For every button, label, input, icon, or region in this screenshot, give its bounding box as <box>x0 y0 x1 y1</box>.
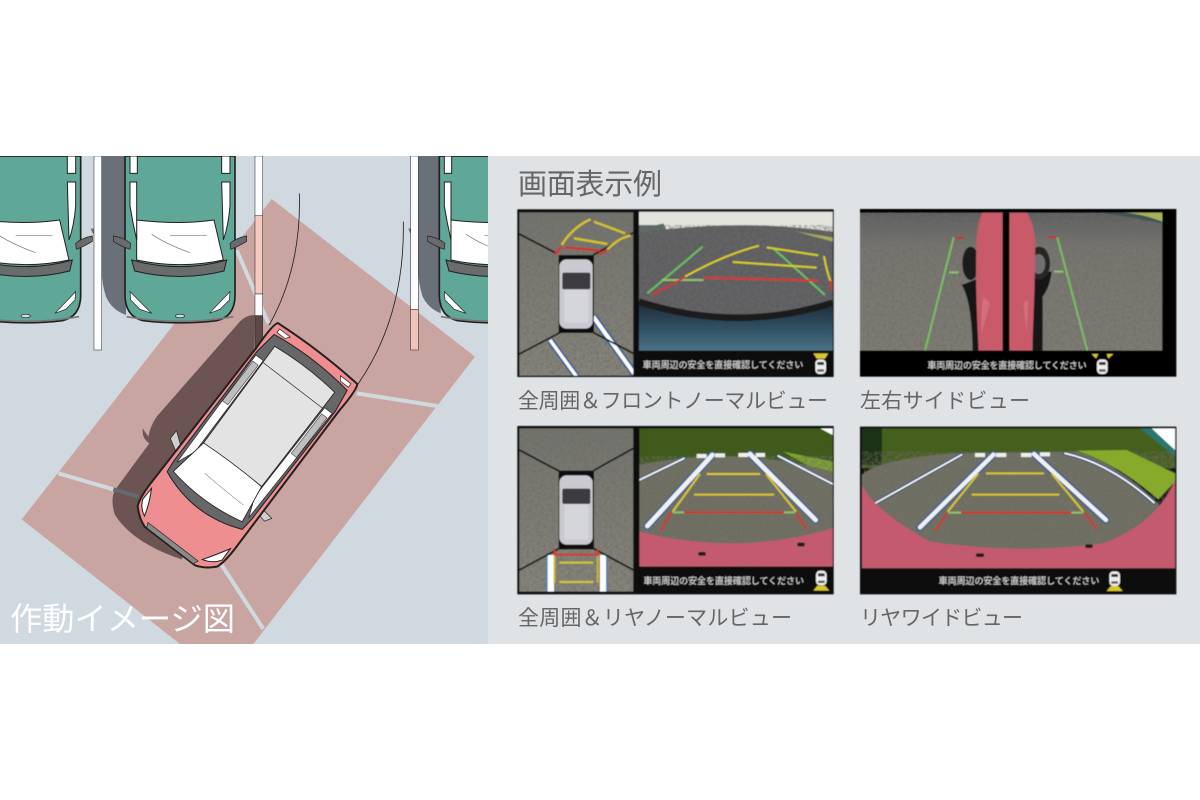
caption: rear view: 全周囲＆リヤノーマルビュー <box>518 607 792 630</box>
pink car <box>136 322 358 568</box>
trajectory arcs <box>269 193 403 385</box>
caption: side view: 左右サイドビュー <box>860 390 1030 413</box>
screen: rear wide view <box>860 427 1176 594</box>
label: operation image: 作動イメージ図 <box>10 601 235 637</box>
cabin dark surround <box>166 334 348 530</box>
infographic canvas <box>0 156 1200 644</box>
panel: screen examples <box>488 156 1200 644</box>
mirrors <box>170 430 272 522</box>
heading: 画面表示例 <box>518 168 662 201</box>
pink car shadow <box>112 315 255 559</box>
roof <box>202 345 336 488</box>
windscreen <box>172 442 262 522</box>
parking area highlight <box>22 199 475 644</box>
parking bay lines <box>58 250 437 629</box>
shadows of parked cars <box>91 156 441 315</box>
screen: all-around and front normal view: 車両周辺の安全を直接確認してください <box>643 359 803 370</box>
screen: all-around and front normal view <box>517 209 834 377</box>
side windows <box>175 355 332 519</box>
parking poles <box>94 156 418 350</box>
screen: left and right side view: 車両周辺の安全を直接確認してください <box>927 359 1087 370</box>
body <box>128 319 361 578</box>
screen: left and right side view <box>860 209 1176 377</box>
screen: all-around and rear normal view: 車両周辺の安全を直接確認してください <box>643 575 804 586</box>
caption: front view: 全周囲＆フロントノーマルビュー <box>518 390 828 413</box>
screen: all-around and rear normal view <box>517 426 834 594</box>
front grille <box>145 523 198 565</box>
panel: parking illustration <box>0 156 488 644</box>
green parked cars <box>0 156 561 323</box>
rear lamps <box>277 329 351 387</box>
caption: rear wide view: リヤワイドビュー <box>860 607 1023 630</box>
screen: rear wide view: 車両周辺の安全を直接確認してください <box>939 575 1099 586</box>
headlights <box>141 486 232 562</box>
bay line through shadow <box>113 489 138 497</box>
